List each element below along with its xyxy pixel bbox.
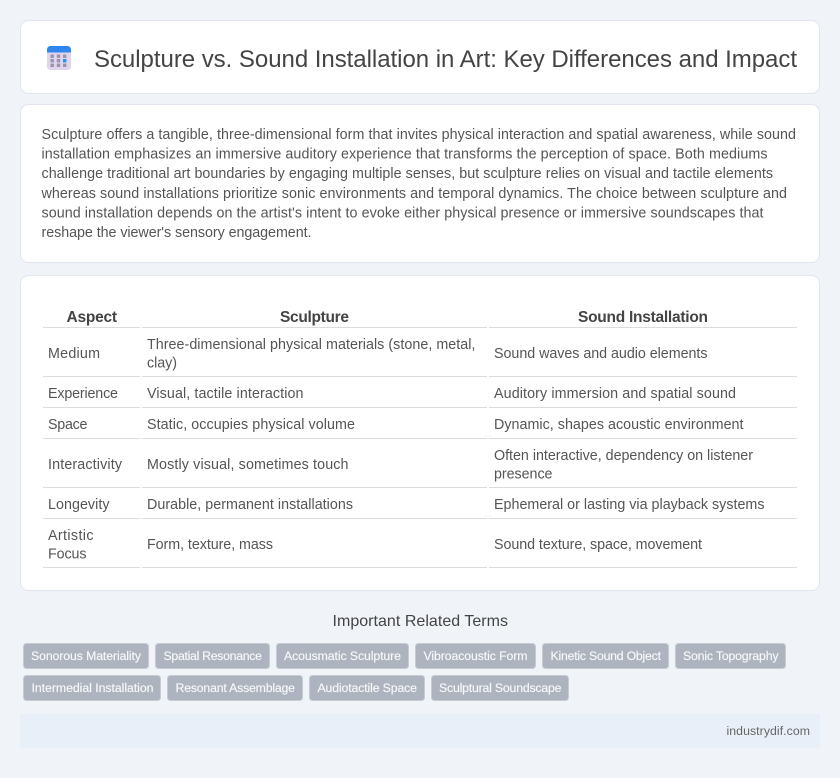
title: Sculpture vs. Sound Installation in Art: Key Differences and Impact xyxy=(94,46,797,73)
row: experience: Visual, tactile interaction xyxy=(147,386,304,402)
tag: Resonant Assemblage: Resonant Assemblage xyxy=(176,681,295,695)
tag: Sonic Topography xyxy=(676,644,786,668)
tag: Vibroacoustic Form: Vibroacoustic Form xyxy=(424,649,528,663)
text block: introduction paragraph: whereas sound installations prioritize sonic environments and temporal dynamics. The choice between sculpture and xyxy=(40,186,787,202)
heading: important related terms: Important Related Terms xyxy=(332,613,508,630)
row: medium xyxy=(48,337,708,372)
tag: Sonic Topography: Sonic Topography xyxy=(683,649,779,663)
table header row: Sound Installation xyxy=(578,309,708,326)
row: artistic focus: Sound texture, space, movement xyxy=(494,537,702,553)
row: space xyxy=(48,417,744,433)
row: longevity xyxy=(48,497,764,513)
tag: Spatial Resonance: Spatial Resonance xyxy=(164,649,262,663)
text block: introduction paragraph: sound installation depends on the artist's intent to evoke either physical presence or immersive soundscapes that xyxy=(42,205,764,221)
tag: Sonorous Materiality: Sonorous Materiality xyxy=(31,649,142,663)
row: interactivity: Often interactive, dependency on listener xyxy=(494,448,753,464)
tag: Audiotactile Space: Audiotactile Space xyxy=(318,681,417,695)
text block: introduction paragraph: installation emphasizes an immersive auditory experience that transforms the perception of space. Both mediums xyxy=(42,147,768,163)
footer bar xyxy=(20,714,820,748)
row: interactivity: presence xyxy=(494,466,553,482)
row: artistic focus: Form, texture, mass xyxy=(147,537,273,553)
row: longevity: Ephemeral or lasting via playback systems xyxy=(494,497,764,513)
panel: introduction xyxy=(20,104,820,262)
row: interactivity: Mostly visual, sometimes touch xyxy=(147,457,349,473)
tag: Resonant Assemblage xyxy=(168,676,302,700)
tag: Acousmatic Sculpture: Acousmatic Sculpture xyxy=(284,649,401,663)
text block: introduction paragraph xyxy=(40,127,796,241)
tag: Acousmatic Sculpture xyxy=(276,644,408,668)
table header row xyxy=(66,309,708,326)
icon: calendar xyxy=(47,46,71,70)
row: medium: Sound waves and audio elements xyxy=(494,346,708,362)
tag: Vibroacoustic Form xyxy=(416,644,536,668)
table header row: Aspect xyxy=(66,309,117,326)
row: experience: Auditory immersion and spatial sound xyxy=(494,386,736,402)
row: medium: Three-dimensional physical materials (stone, metal, xyxy=(147,337,476,353)
row: interactivity: Interactivity xyxy=(48,457,123,473)
text block: introduction paragraph: Sculpture offers a tangible, three-dimensional form that invites physical interaction and spatial awareness, while sound xyxy=(42,127,796,143)
footer source text: industrydif.com xyxy=(726,724,810,738)
row: space: Static, occupies physical volume xyxy=(147,417,355,433)
table header row: Sculpture xyxy=(280,309,349,326)
tag: Kinetic Sound Object xyxy=(542,644,668,668)
row: artistic focus: Focus xyxy=(48,546,86,562)
tag: Sculptural Soundscape: Sculptural Soundscape xyxy=(439,681,562,695)
text block: introduction paragraph: challenge traditional art boundaries by engaging multiple senses, but sculpture relies on visual and tactile elements xyxy=(42,166,773,182)
tag: Spatial Resonance xyxy=(156,644,270,668)
row: longevity: Durable, permanent installations xyxy=(147,497,353,513)
tag: Sonorous Materiality xyxy=(24,644,148,668)
row: medium: clay) xyxy=(147,356,177,372)
tag: Audiotactile Space xyxy=(310,676,424,700)
row: artistic focus xyxy=(48,528,702,562)
tag: Kinetic Sound Object: Kinetic Sound Object xyxy=(550,649,662,663)
row: space: Space xyxy=(48,417,88,433)
row: space: Dynamic, shapes acoustic environment xyxy=(494,417,744,433)
row: interactivity xyxy=(48,448,753,482)
tag: Intermedial Installation xyxy=(24,676,160,700)
panel: comparison table xyxy=(20,276,820,590)
tag: Sculptural Soundscape xyxy=(432,676,568,700)
row: longevity: Longevity xyxy=(48,497,110,513)
tag: Intermedial Installation: Intermedial Installation xyxy=(32,681,154,695)
row: medium: Medium xyxy=(48,346,100,362)
panel: header xyxy=(20,20,820,94)
text block: introduction paragraph: reshape the viewer's sensory engagement. xyxy=(42,225,312,241)
row: experience: Experience xyxy=(48,386,118,402)
row: artistic focus: Artistic xyxy=(48,528,94,544)
tag list: related terms xyxy=(24,644,786,700)
row: experience xyxy=(48,386,736,402)
